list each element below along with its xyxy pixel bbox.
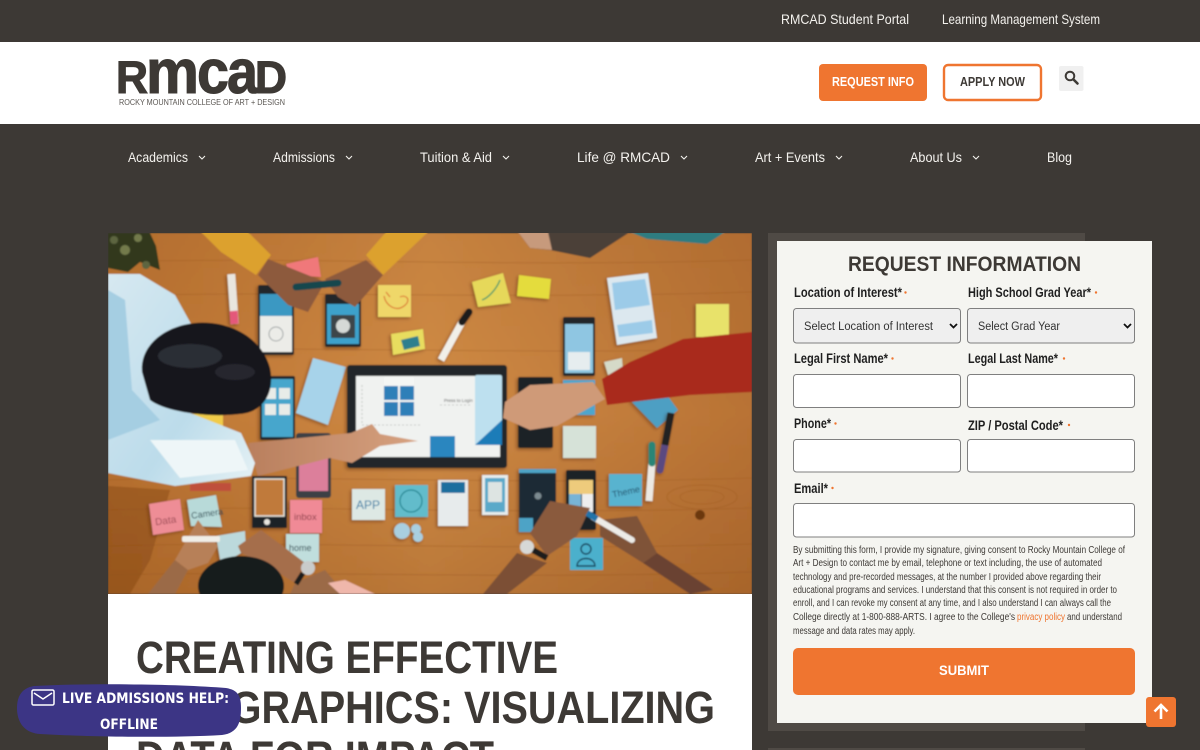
field labels: Email* — [794, 481, 829, 496]
logo: m — [146, 38, 199, 107]
live admissions chat badge: OFFLINE — [100, 717, 158, 733]
notes and wireframes, lower area — [149, 413, 671, 565]
notes and wireframes, lower area: Data — [155, 514, 177, 528]
consent text: enroll, and I can revoke my consent at any time, and I also understand I can always call the — [793, 598, 1111, 609]
submit button — [793, 648, 1135, 695]
plant — [108, 233, 160, 272]
live admissions chat badge: LIVE ADMISSIONS HELP: — [62, 691, 229, 707]
writing hands, foreground — [148, 520, 375, 594]
field labels: Location of Interest* — [794, 285, 903, 300]
field labels: Legal Last Name* — [968, 351, 1059, 366]
tablet with flow chart — [347, 365, 507, 468]
article panel — [108, 594, 752, 750]
text inputs — [794, 374, 1134, 537]
button: request info — [819, 64, 927, 101]
wireframe phones and cards, top area — [258, 273, 678, 448]
select: grad year — [968, 308, 1134, 343]
icon: search — [1059, 66, 1084, 91]
consent text: By submitting this form, I provide my signature, giving consent to Rocky Mountain College of — [793, 545, 1125, 556]
logo: a — [227, 38, 258, 107]
article title: INFOGRAPHICS: VISUALIZING — [136, 682, 715, 733]
sidebar panel — [768, 233, 1085, 731]
wooden table — [108, 233, 752, 594]
consent text: College directly at 1-800-888-ARTS. I agree to the College's — [793, 612, 1015, 623]
second sidebar panel — [768, 748, 1085, 750]
select: location — [794, 308, 960, 343]
header bar — [0, 38, 1200, 124]
field labels: ZIP / Postal Code* — [968, 418, 1064, 433]
tablet with flow chart: Press to Login — [444, 398, 473, 403]
main navigation: Art + Events — [755, 149, 825, 165]
consent text: technology and pre-recorded messages, at the number I provided above regarding their — [793, 572, 1102, 583]
hands with marker, foreground right — [483, 501, 713, 594]
consent text: Art + Design to contact me by email, telephone or text including, the use of automated — [793, 558, 1102, 569]
field labels: Legal First Name* — [794, 351, 889, 366]
hero photo: team planning app wireframes on wooden table — [108, 232, 752, 616]
logo: R — [116, 52, 148, 103]
button: request info: REQUEST INFO — [832, 75, 914, 89]
main navigation: Admissions — [273, 149, 335, 165]
form heading: REQUEST INFORMATION — [848, 252, 1081, 276]
main navigation: Tuition & Aid — [420, 149, 492, 165]
button: apply now: APPLY NOW — [960, 75, 1025, 89]
main navigation: Life @ RMCAD — [577, 149, 670, 165]
required markers — [831, 291, 1097, 489]
main navigation — [128, 149, 1072, 165]
consent text: and understand — [1067, 612, 1122, 623]
submit button: SUBMIT — [939, 662, 989, 678]
field labels: High School Grad Year* — [968, 285, 1092, 300]
top utility bar: Learning Management System — [942, 11, 1100, 27]
top utility bar — [0, 0, 1200, 41]
yellow-sleeved designer's arms and hands — [201, 232, 428, 312]
select: location: Select Location of Interest — [804, 321, 934, 333]
main navigation: Blog — [1047, 149, 1072, 165]
button: apply now — [944, 65, 1041, 100]
field labels: Phone* — [794, 416, 832, 431]
icon: envelope — [32, 690, 54, 705]
consent text — [793, 545, 1125, 637]
main navigation: Academics — [128, 149, 188, 165]
consent text: educational programs and services. I understand that this consent is not required in order to — [793, 585, 1117, 596]
notes and wireframes, lower area: Theme — [611, 484, 641, 500]
logo — [116, 38, 287, 107]
back to top button — [1146, 697, 1176, 727]
consent text: privacy policy — [1017, 612, 1065, 623]
notes and wireframes, lower area: inbox — [294, 512, 317, 523]
live admissions chat badge — [17, 684, 241, 737]
logo: c — [197, 38, 229, 107]
main navigation: About Us — [910, 149, 962, 165]
notes and wireframes, lower area: APP — [356, 498, 380, 512]
select: grad year: Select Grad Year — [978, 321, 1060, 333]
notes and wireframes, lower area: Camera — [191, 506, 224, 521]
consent text: message and data rates may apply. — [793, 626, 915, 637]
logo: D — [255, 52, 287, 103]
notes and wireframes, lower area: home — [289, 543, 312, 553]
article title: CREATING EFFECTIVE — [136, 632, 558, 683]
top utility bar: RMCAD Student Portal — [781, 11, 909, 27]
sticky notes and pens, top area — [227, 257, 729, 360]
person at top and red-sleeved arm — [503, 232, 752, 430]
field labels — [794, 285, 1092, 496]
blue-shirt designer with pointing arm — [108, 274, 418, 498]
request information form — [777, 241, 1152, 723]
logo: ROCKY MOUNTAIN COLLEGE OF ART + DESIGN — [119, 97, 285, 107]
article title — [136, 632, 715, 750]
